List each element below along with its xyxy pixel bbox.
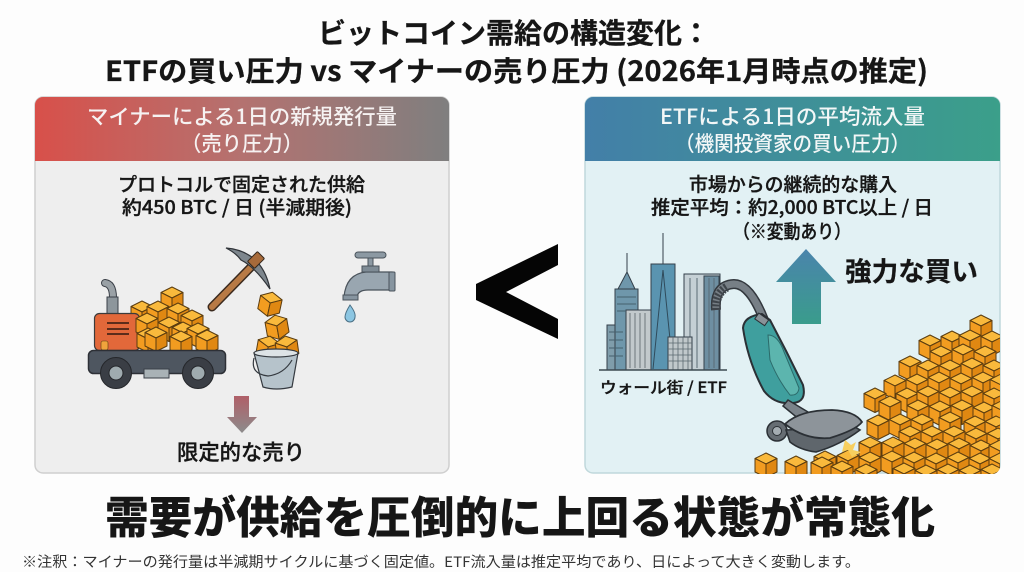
label: strong buying: 強力な買い <box>845 250 978 289</box>
arrow: up <box>776 249 836 324</box>
right panel description: （※変動あり） <box>733 217 851 244</box>
panel: miner supply <box>35 97 449 473</box>
right panel description: 市場からの継続的な購入 <box>689 170 897 197</box>
arrow: down <box>227 396 257 433</box>
left panel header: マイナーによる1日の新規発行量 <box>87 101 397 131</box>
icon: pickaxe <box>212 248 270 307</box>
right panel description: 推定平均：約2,000 BTC以上 / 日 <box>651 193 933 220</box>
icon: vacuum cleaner <box>716 284 862 452</box>
left panel description <box>118 170 365 220</box>
left panel header <box>35 97 449 161</box>
left panel description: プロトコルで固定された供給 <box>118 170 365 197</box>
right panel description <box>651 170 933 244</box>
icon: falling cubes and bucket <box>253 290 300 389</box>
panel: ETF demand <box>585 97 1014 490</box>
right panel header: ETFによる1日の平均流入量 <box>660 101 925 131</box>
title <box>105 12 928 90</box>
title: ETFの買い圧力 vs マイナーの売り圧力 (2026年1月時点の推定) <box>105 50 928 90</box>
left panel header: （売り圧力） <box>181 128 303 158</box>
label: Wall Street / ETF: ウォール街 / ETF <box>600 376 727 398</box>
conclusion headline: 需要が供給を圧倒的に上回る状態が常態化 <box>105 482 935 546</box>
left panel description: 約450 BTC / 日 (半減期後) <box>122 193 352 220</box>
icon: mining truck with cubes <box>88 283 226 388</box>
icon: faucet with drop <box>343 252 395 322</box>
title: ビットコイン需給の構造変化： <box>318 12 710 52</box>
right panel header <box>585 97 1000 161</box>
icon: Wall Street skyline <box>599 233 727 370</box>
pile of bitcoin cubes <box>754 314 1000 474</box>
label: limited selling: 限定的な売り <box>177 436 305 467</box>
right panel header: （機関投資家の買い圧力） <box>675 128 910 158</box>
comparison symbol <box>476 244 558 339</box>
footnote: ※注釈：マイナーの発行量は半減期サイクルに基づく固定値。ETF流入量は推定平均であり、日によって大きく変動します。 <box>22 551 860 572</box>
